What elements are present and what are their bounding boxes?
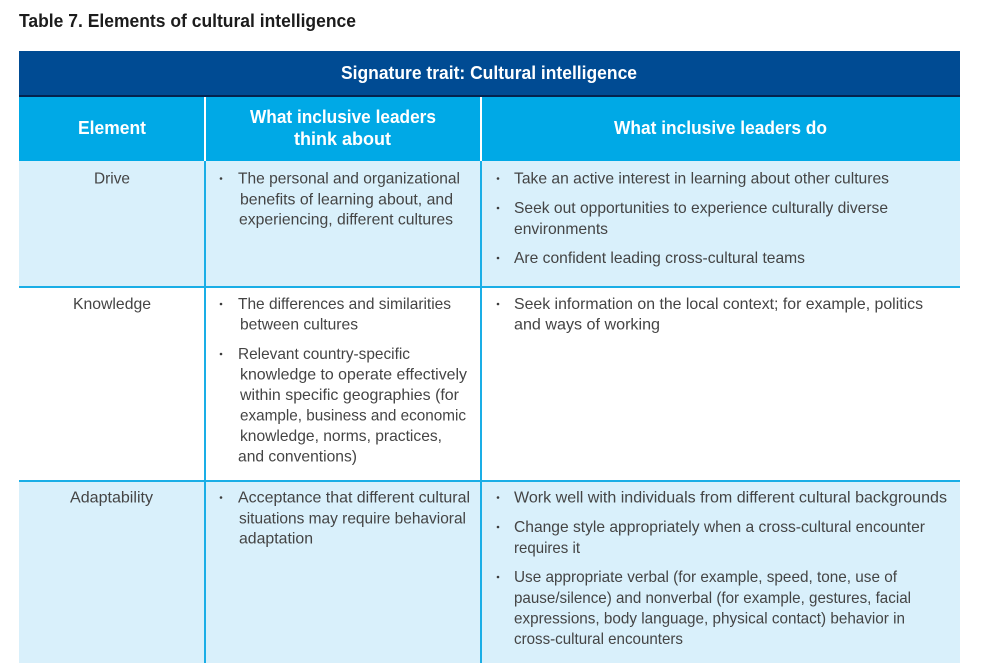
banner: signature trait xyxy=(19,51,960,97)
think about: knowledge: and conventions) xyxy=(238,448,357,466)
think about: knowledge: example, business and economic xyxy=(240,408,466,424)
column heading: do: What inclusive leaders do xyxy=(614,118,827,138)
think about: drive: experiencing, different cultures xyxy=(239,212,453,228)
banner: signature trait: Signature trait: Cultural intelligence xyxy=(341,63,637,83)
think about: knowledge: The differences and similarities xyxy=(238,296,451,313)
label: drive: Drive xyxy=(94,170,130,188)
row: knowledge xyxy=(73,296,923,466)
column heading: think about xyxy=(250,107,436,149)
think about: adaptability: adaptation xyxy=(239,530,313,548)
column header row xyxy=(19,97,960,161)
think about: adaptability: Acceptance that different cultural xyxy=(238,490,470,506)
column heading: think about: think about xyxy=(294,129,391,149)
row: drive xyxy=(94,170,889,267)
think about: knowledge: between cultures xyxy=(240,316,358,334)
actions: adaptability: Work well with individuals from different cultural backgrounds xyxy=(514,490,947,506)
actions: drive xyxy=(497,170,889,267)
actions: adaptability: expressions, body language, physical contact) behavior in xyxy=(514,610,905,628)
think about: adaptability: situations may require behavioral xyxy=(239,510,466,528)
actions: drive: Take an active interest in learning about other cultures xyxy=(514,170,889,188)
actions: knowledge xyxy=(497,296,923,334)
actions: knowledge: Seek information on the local context; for example, politics xyxy=(514,296,923,313)
actions: adaptability: Change style appropriately when a cross-cultural encounter xyxy=(514,519,926,536)
think about: drive: The personal and organizational xyxy=(238,170,460,188)
row: adaptability xyxy=(70,490,947,648)
actions: adaptability: cross-cultural encounters xyxy=(514,631,683,648)
actions: drive: Seek out opportunities to experience culturally diverse xyxy=(514,200,888,217)
row background: drive xyxy=(19,161,960,286)
actions: adaptability: pause/silence) and nonverbal (for example, gestures, facial xyxy=(514,590,911,607)
actions: adaptability: Use appropriate verbal (for example, speed, tone, use of xyxy=(514,569,898,586)
actions: drive: Are confident leading cross-cultural teams xyxy=(514,250,805,267)
think about: knowledge xyxy=(220,296,467,466)
actions: drive: environments xyxy=(514,221,608,238)
actions: adaptability: requires it xyxy=(514,540,581,557)
actions: adaptability xyxy=(497,490,947,648)
think about: adaptability xyxy=(220,490,470,548)
think about: drive: benefits of learning about, and xyxy=(240,192,453,208)
column heading: think about: What inclusive leaders xyxy=(250,107,436,127)
column heading: element: Element xyxy=(78,118,146,138)
think about: knowledge: knowledge to operate effectively xyxy=(240,366,467,384)
row background: adaptability xyxy=(19,481,960,663)
label: adaptability: Adaptability xyxy=(70,490,153,506)
think about: knowledge: Relevant country-specific xyxy=(238,346,410,363)
label: knowledge: Knowledge xyxy=(73,296,151,313)
think about: drive xyxy=(220,170,460,228)
think about: knowledge: within specific geographies (for xyxy=(239,387,460,404)
actions: knowledge: and ways of working xyxy=(514,316,660,334)
title: Table 7. Elements of cultural intelligence xyxy=(19,11,356,31)
think about: knowledge: knowledge, norms, practices, xyxy=(240,428,442,445)
